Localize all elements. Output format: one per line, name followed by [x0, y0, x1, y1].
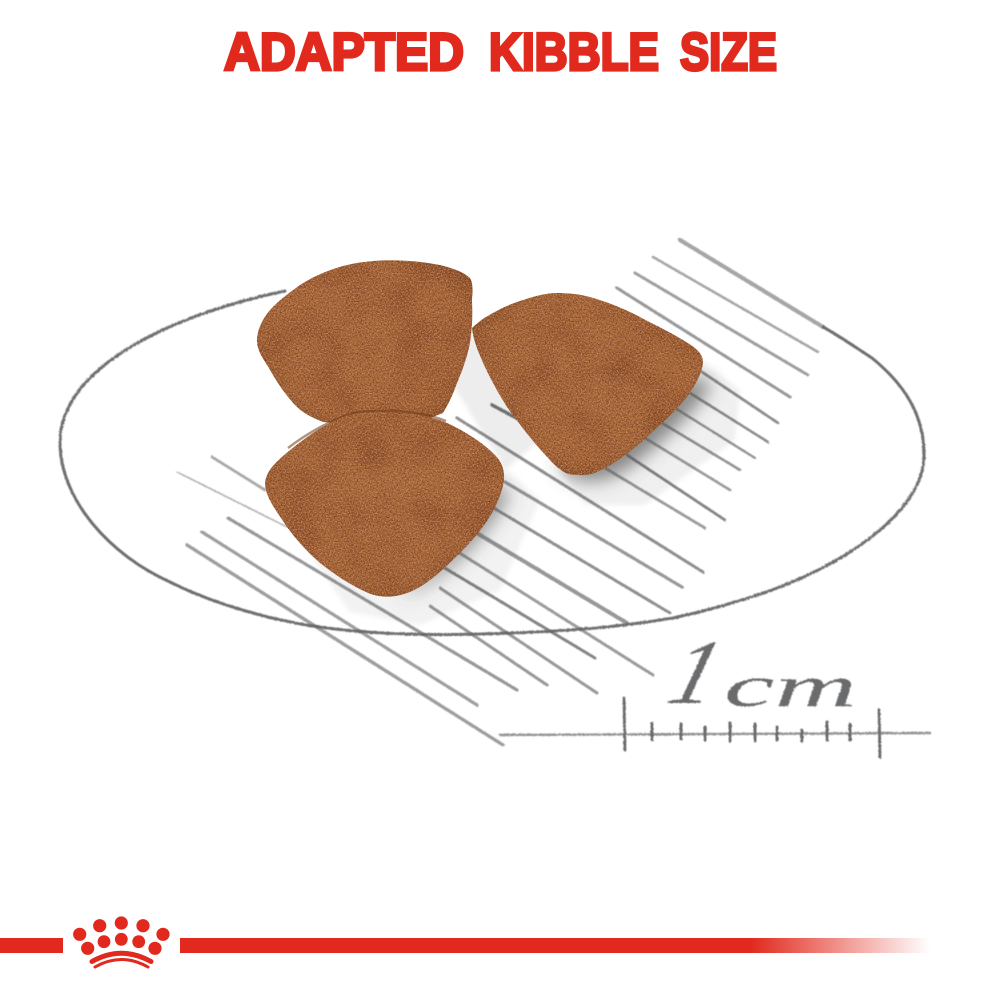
kibble: top left — [257, 260, 473, 430]
title: KIBBLE — [489, 23, 659, 82]
footer bar left — [0, 938, 63, 953]
pencil sketch: plate outline — [60, 291, 924, 635]
title — [224, 23, 777, 82]
pencil sketch: hatch shading — [177, 240, 823, 745]
handwritten size label: 1 — [658, 622, 733, 724]
kibble shadows — [300, 330, 740, 625]
kibble: bottom contact edge — [288, 411, 446, 448]
footer bar right — [180, 938, 930, 953]
title: ADAPTED — [224, 23, 464, 82]
handwritten size label: cm — [724, 654, 857, 719]
handwritten size label — [658, 622, 857, 724]
title: SIZE — [680, 23, 777, 82]
icon: royal crown logo — [73, 916, 170, 967]
kibble: right — [472, 293, 703, 475]
kibble: bottom — [265, 412, 504, 597]
ruler scale — [500, 698, 930, 757]
